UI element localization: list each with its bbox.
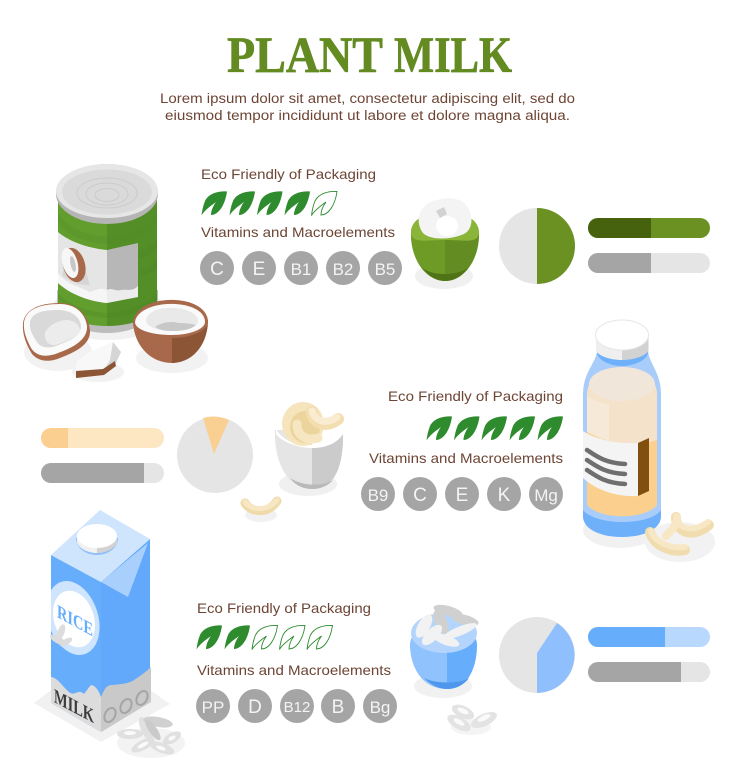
rating: five of five leaves (426, 416, 563, 440)
heading: vitamins: Vitamins and Macroelements (369, 450, 563, 466)
panel: rice milk (34, 510, 710, 758)
panel: cashew milk (41, 320, 715, 562)
vitamin badges: C (413, 485, 427, 506)
pie chart: small slice (177, 417, 253, 493)
rating: four of five leaves (202, 191, 337, 216)
vitamin badges: B2 (333, 260, 353, 279)
vitamin badges (361, 477, 563, 511)
heading: eco friendly: Eco Friendly of Packaging (197, 600, 371, 616)
bar: blue (588, 627, 710, 647)
bar: grey (588, 662, 710, 682)
title (227, 28, 512, 84)
bar: grey (588, 253, 710, 273)
illustration: cashew milk bottle (583, 320, 661, 548)
vitamin badges: B (332, 697, 344, 718)
illustration: single cashew (245, 500, 277, 522)
illustration: rice grains by carton (117, 714, 185, 758)
bar: green (588, 218, 710, 238)
carton milk splash (51, 677, 101, 732)
rice badge (51, 581, 100, 655)
vitamin badges: E (253, 259, 265, 280)
vitamin badges: C (210, 259, 224, 280)
illustration: rice milk carton: MILK (54, 684, 94, 728)
vitamin badges: PP (202, 698, 224, 717)
vitamin badges: Mg (534, 486, 558, 505)
vitamin badges: B9 (368, 486, 388, 505)
illustration: cashews by bottle (645, 516, 715, 562)
title: MILK (394, 28, 512, 84)
illustration: coconut bowl (411, 198, 479, 289)
illustration: coconut halves (23, 300, 208, 382)
illustration: rice milk carton: RICE (57, 601, 93, 641)
illustration: rice bowl (410, 602, 480, 698)
vitamin badges: Bg (370, 698, 390, 717)
illustration: cashew bowl (275, 402, 343, 496)
intro text: eiusmod tempor incididunt ut labore et dolore magna aliqua. (165, 108, 570, 123)
vitamin badges (200, 251, 402, 285)
bar: grey (41, 463, 164, 483)
vitamin badges: B1 (291, 260, 311, 279)
pie chart: blue slice (499, 617, 575, 693)
coconut on label (59, 245, 89, 285)
heading: eco friendly: Eco Friendly of Packaging (388, 388, 563, 404)
vitamin badges: B5 (375, 260, 395, 279)
vitamin badges: E (456, 485, 468, 506)
intro text (160, 91, 575, 123)
rating: two of five leaves (196, 625, 332, 650)
illustration: coconut milk can (50, 164, 166, 340)
vitamin badges (196, 689, 397, 723)
heading: eco friendly: Eco Friendly of Packaging (201, 166, 376, 182)
vitamin badges: D (248, 697, 262, 718)
vitamin badges: K (498, 485, 511, 506)
pie chart: 50 percent (499, 208, 575, 284)
illustration: rice grains by bowl (445, 701, 499, 735)
heading: vitamins: Vitamins and Macroelements (201, 224, 395, 240)
title: PLANT (227, 28, 383, 84)
heading: vitamins: Vitamins and Macroelements (197, 662, 391, 678)
intro text: Lorem ipsum dolor sit amet, consectetur adipiscing elit, sed do (160, 91, 575, 106)
panel: coconut milk (23, 164, 710, 382)
illustration: rice milk carton (34, 510, 170, 742)
vitamin badges: B12 (284, 699, 310, 716)
bar: cream (41, 428, 164, 448)
